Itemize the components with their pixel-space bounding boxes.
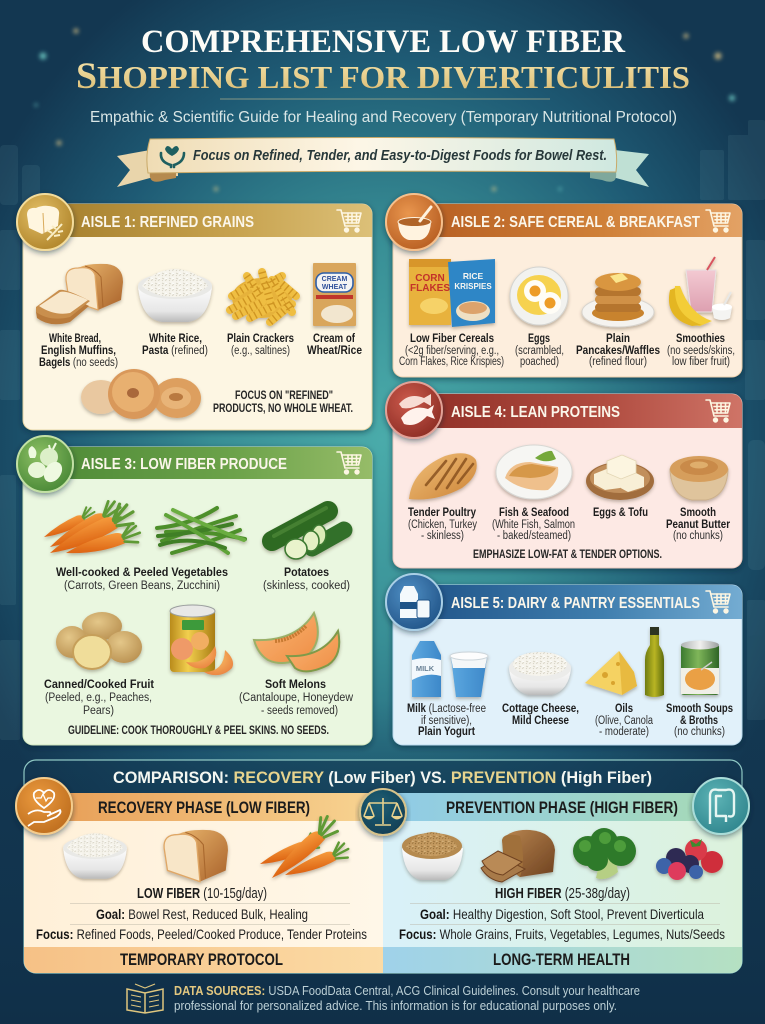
aisle 3 header (23, 447, 372, 479)
olive oil bottle (645, 627, 664, 697)
cereals label (399, 333, 504, 368)
canned fruit label: (Peeled, e.g., Peaches, (45, 692, 152, 704)
peanut butter label: Smooth (680, 507, 716, 519)
poultry label (408, 507, 477, 542)
prevention footer bar (383, 947, 742, 973)
canned fruit label: Canned/Cooked Fruit (44, 679, 154, 691)
aisle 5 header (393, 585, 742, 619)
aisle 3 guideline: GUIDELINE: COOK THOROUGHLY & PEEL SKINS. NO SEEDS. (68, 725, 329, 737)
prevention column (383, 793, 742, 973)
eggs label: poached) (520, 356, 559, 368)
smoothies label: (no seeds/skins, (667, 345, 735, 357)
cereals label: Low Fiber Cereals (410, 333, 494, 345)
aisle 1 heading: AISLE 1: REFINED GRAINS (81, 214, 254, 231)
cereal boxes: FLAKES (410, 283, 450, 294)
cereal boxes: KRISPIES (454, 282, 492, 291)
cream of wheat label: Cream of (313, 333, 355, 345)
title: COMPREHENSIVE LOW FIBER (141, 24, 626, 60)
broccoli (573, 828, 636, 879)
peanut butter label: (no chunks) (673, 530, 723, 542)
panel: aisle 2 cereal and breakfast (386, 194, 742, 377)
white bread label: English Muffins, (41, 345, 116, 357)
milk carton: MILK (416, 664, 435, 673)
panel: comparison (16, 760, 749, 973)
canned fruit (170, 605, 233, 675)
oils label: - moderate) (599, 726, 649, 738)
cereal boxes (409, 259, 495, 327)
recovery carrots (257, 813, 351, 878)
aisle 3 heading: AISLE 3: LOW FIBER PRODUCE (81, 456, 287, 473)
green beans (157, 508, 245, 553)
peanut butter (670, 456, 728, 500)
comparison heading: COMPARISON: RECOVERY (Low Fiber) VS. PREVENTION (High Fiber) (113, 769, 652, 787)
melons label: (Cantaloupe, Honeydew (239, 692, 354, 704)
cream of wheat box (313, 263, 356, 326)
aisle 5 icon: milk carton (386, 574, 442, 630)
white rice label: White Rice, (149, 333, 202, 345)
cream of wheat label (307, 333, 362, 357)
grilled chicken (409, 453, 477, 500)
canned fruit label: Pears) (83, 705, 114, 717)
soups label: (no chunks) (674, 726, 725, 738)
aisle 1 note (213, 390, 353, 415)
crackers label: (e.g., saltines) (231, 345, 290, 357)
pancakes label: Plain (606, 333, 630, 345)
poultry label: - skinless) (421, 530, 464, 542)
eggs label: (scrambled, (515, 345, 564, 357)
melons label (239, 679, 354, 717)
bagels and muffins (81, 369, 201, 419)
recovery header text: RECOVERY PHASE (LOW FIBER) (98, 798, 310, 817)
cream of wheat box: CREAM (322, 276, 347, 283)
brown rice bowl (402, 832, 463, 880)
banner text: Focus on Refined, Tender, and Easy-to-Digest Foods for Bowel Rest. (193, 148, 607, 164)
peanut butter label: Peanut Butter (666, 519, 730, 531)
white bread (36, 264, 123, 324)
tofu label: Eggs & Tofu (593, 507, 648, 519)
oils label: (Olive, Canola (595, 715, 653, 727)
cereal boxes: CORN (415, 273, 445, 284)
aisle 2 header (393, 204, 742, 237)
aisle 1 icon: bread and wheat (17, 194, 73, 250)
pancakes (582, 273, 654, 327)
soups label (666, 703, 733, 738)
cheese wedge (585, 651, 637, 695)
title: SHOPPING LIST FOR DIVERTICULITIS (76, 56, 690, 97)
icon: intestines (693, 778, 749, 834)
cereals label: (<2g fiber/serving, e.g., (405, 345, 499, 357)
high fiber text: HIGH FIBER (25-38g/day) (495, 885, 630, 902)
canned fruit label (44, 679, 154, 717)
prevention header text: PREVENTION PHASE (HIGH FIBER) (446, 798, 678, 817)
rice bowl (138, 269, 212, 322)
soups label: & Broths (680, 715, 718, 727)
prevention header bar (383, 793, 742, 821)
vegetables label: (Carrots, Green Beans, Zucchini) (64, 580, 220, 592)
icon: cart (337, 210, 361, 232)
recovery footer text: TEMPORARY PROTOCOL (120, 950, 283, 969)
icon: open book (127, 984, 163, 1013)
panel: aisle 3 produce (17, 436, 372, 745)
white bread label (39, 333, 118, 369)
zucchini (272, 508, 344, 559)
white bread label: White Bread, (49, 333, 101, 345)
white rice label: Pasta (refined) (142, 345, 208, 357)
whole grain bread (481, 830, 555, 882)
vegetables label (56, 567, 228, 592)
prevention footer text: LONG-TERM HEALTH (493, 950, 630, 969)
eggs label: Eggs (528, 333, 550, 345)
icon: heart and hand (16, 778, 72, 834)
smoothies label: Smoothies (676, 333, 725, 345)
fish label (492, 507, 575, 542)
icon: cart (337, 452, 361, 474)
fusilli pasta (230, 272, 296, 322)
poultry label: (Chicken, Turkey (408, 519, 477, 531)
recovery rice bowl (63, 833, 127, 879)
recovery footer bar (24, 947, 383, 973)
aisle 1 note: FOCUS ON "REFINED" (235, 390, 333, 402)
tofu (586, 455, 654, 500)
panel: aisle 5 dairy and pantry (386, 574, 742, 745)
recovery focus: Focus: Refined Foods, Peeled/Cooked Produce, Tender Proteins (36, 926, 367, 942)
aisle 4 note: EMPHASIZE LOW-FAT & TENDER OPTIONS. (473, 549, 662, 561)
aisle 4 header (393, 394, 742, 428)
low fiber text: LOW FIBER (10-15g/day) (137, 885, 267, 902)
peanut butter label (666, 507, 730, 542)
cereals label: Corn Flakes, Rice Krispies) (399, 356, 504, 368)
smoothie and banana (669, 257, 732, 326)
milk and yogurt label: if sensitive), (421, 715, 472, 727)
aisle 4 icon: fish (386, 382, 442, 438)
white bread label: Bagels (no seeds) (39, 357, 118, 369)
milk carton (412, 641, 441, 697)
recovery header bar (24, 793, 383, 821)
aisle 3 icon: vegetables (17, 436, 73, 492)
milk and yogurt label: Plain Yogurt (418, 726, 475, 738)
aisle 1 note: PRODUCTS, NO WHOLE WHEAT. (213, 403, 353, 415)
prevention goal: Goal: Healthy Digestion, Soft Stool, Prevent Diverticula (420, 906, 704, 922)
eggs plate (510, 267, 568, 325)
potatoes label: Potatoes (284, 567, 329, 579)
yogurt cup (450, 652, 488, 697)
icon: cart (706, 210, 730, 232)
cream of wheat label: Wheat/Rice (307, 345, 362, 357)
recovery white bread (164, 830, 228, 882)
recovery column (24, 793, 383, 973)
carrots (40, 499, 140, 553)
potatoes label (263, 567, 350, 592)
panel: aisle 4 lean proteins (386, 382, 742, 568)
recovery goal: Goal: Bowel Rest, Reduced Bulk, Healing (96, 906, 308, 922)
potatoes label: (skinless, cooked) (263, 580, 350, 592)
title (76, 24, 690, 97)
aisle 5 heading: AISLE 5: DAIRY & PANTRY ESSENTIALS (451, 595, 700, 612)
melons (254, 613, 339, 671)
oils label (595, 703, 653, 738)
cereal boxes: RICE (463, 271, 483, 281)
aisle 4 heading: AISLE 4: LEAN PROTEINS (451, 404, 620, 421)
smoothies label: low fiber fruit) (672, 356, 730, 368)
data sources (174, 984, 640, 1013)
crackers label (227, 333, 294, 357)
data sources: professional for personalized advice. This information is for educational purposes only. (174, 999, 617, 1013)
potatoes (56, 612, 142, 669)
data sources: DATA SOURCES: USDA FoodData Central, ACG Clinical Guidelines. Consult your healthcare (174, 984, 640, 998)
smoothies label (667, 333, 735, 368)
icon: cart (706, 591, 730, 613)
icon: heart in hands (161, 146, 184, 167)
pancakes label: (refined flour) (589, 356, 647, 368)
cottage cheese label (502, 703, 579, 727)
cottage cheese label: Cottage Cheese, (502, 703, 579, 715)
aisle 2 heading: AISLE 2: SAFE CEREAL & BREAKFAST (451, 214, 700, 231)
fish plate (496, 445, 572, 499)
milk and yogurt label (407, 703, 486, 738)
cream of wheat box: WHEAT (322, 284, 348, 291)
white rice label (142, 333, 208, 357)
crackers label: Plain Crackers (227, 333, 294, 345)
oils label: Oils (615, 703, 633, 715)
eggs label (515, 333, 564, 368)
fish label: - baked/steamed) (497, 530, 571, 542)
pancakes label: Pancakes/Waffles (576, 345, 660, 357)
vegetables label: Well-cooked & Peeled Vegetables (56, 567, 228, 579)
icon: balance scales (360, 789, 406, 835)
banner ribbon (117, 138, 649, 187)
subtitle: Empathic & Scientific Guide for Healing and Recovery (Temporary Nutritional Protocol) (90, 109, 677, 126)
icon: cart (706, 400, 730, 422)
aisle 2 icon: bowl (386, 194, 442, 250)
cottage cheese label: Mild Cheese (512, 715, 569, 727)
poultry label: Tender Poultry (408, 507, 476, 519)
milk and yogurt label: Milk (Lactose-free (407, 703, 486, 715)
panel: aisle 1 refined grains (17, 194, 372, 430)
pancakes label (576, 333, 660, 368)
title divider (220, 98, 550, 100)
melons label: - seeds removed) (261, 705, 338, 717)
cottage cheese bowl (509, 652, 571, 695)
berries (656, 839, 723, 880)
melons label: Soft Melons (265, 679, 326, 691)
fish label: Fish & Seafood (499, 507, 569, 519)
fish label: (White Fish, Salmon (492, 519, 575, 531)
soups label: Smooth Soups (666, 703, 733, 715)
aisle 1 header (23, 204, 372, 237)
soup can (681, 640, 719, 695)
